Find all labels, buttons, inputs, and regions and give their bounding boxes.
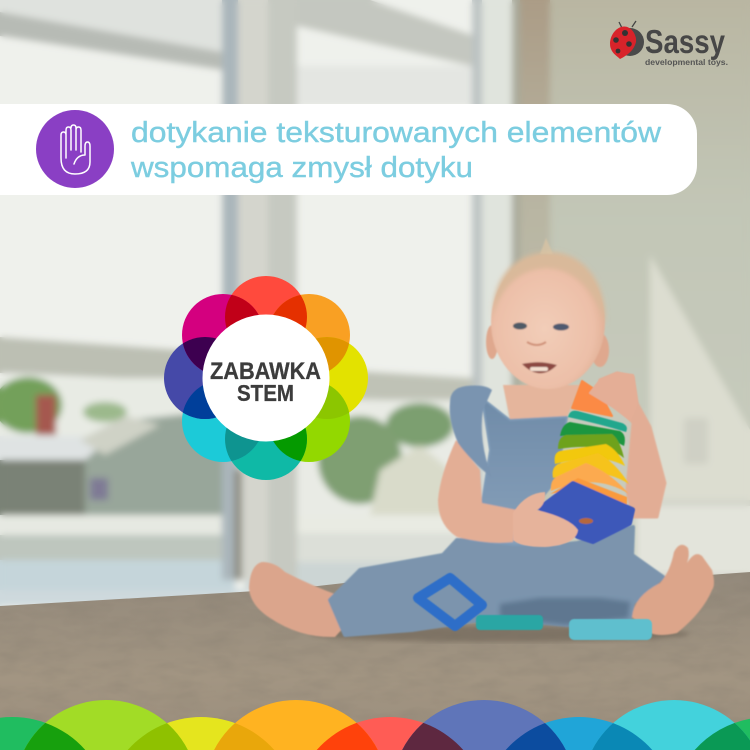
badge: flower — [164, 276, 368, 480]
teal ring — [568, 411, 627, 432]
blue square ring — [418, 578, 482, 626]
badge text line 2: STEM — [237, 380, 294, 406]
stacking toy — [513, 373, 637, 547]
logo wordmark: Sassy — [645, 23, 726, 60]
left hand — [513, 492, 578, 547]
yellow ring — [555, 444, 625, 466]
baby photo subject — [249, 238, 714, 637]
banner — [0, 104, 697, 195]
banner text line 1: dotykanie teksturowanych elementów — [131, 117, 662, 149]
romper fold shadow — [500, 598, 630, 625]
lime green ring — [558, 434, 624, 458]
neck and chest — [503, 385, 580, 420]
banner background — [0, 104, 697, 195]
rainbow scallop border — [0, 700, 750, 750]
logo: Sassy — [610, 21, 728, 67]
dark orange ring — [550, 478, 627, 505]
flower centre — [202, 314, 330, 442]
left arm — [438, 440, 517, 543]
logo tagline: developmental toys. — [645, 57, 728, 67]
blue base — [541, 484, 632, 541]
head — [486, 238, 609, 389]
icon: purple circle with hand — [36, 110, 114, 188]
dark green ring — [560, 422, 625, 446]
left foot — [249, 562, 352, 637]
orange top piece — [572, 381, 612, 416]
light blue tile — [569, 619, 652, 640]
right arm — [600, 373, 665, 517]
floor toys — [418, 578, 652, 640]
banner text line 2: wspomaga zmysł dotyku — [130, 152, 473, 184]
right foot — [632, 545, 714, 635]
deep yellow ring — [553, 453, 629, 484]
dress ruffle — [450, 386, 492, 478]
orange ring — [551, 463, 629, 494]
denim dress torso — [470, 398, 567, 545]
flower petals — [164, 276, 368, 480]
icon: ladybug — [610, 21, 644, 59]
carpet — [0, 572, 750, 723]
teal bar — [476, 615, 543, 630]
denim romper legs — [330, 527, 663, 635]
right hand — [590, 373, 637, 420]
badge text line 1: ZABAWKA — [210, 358, 321, 385]
